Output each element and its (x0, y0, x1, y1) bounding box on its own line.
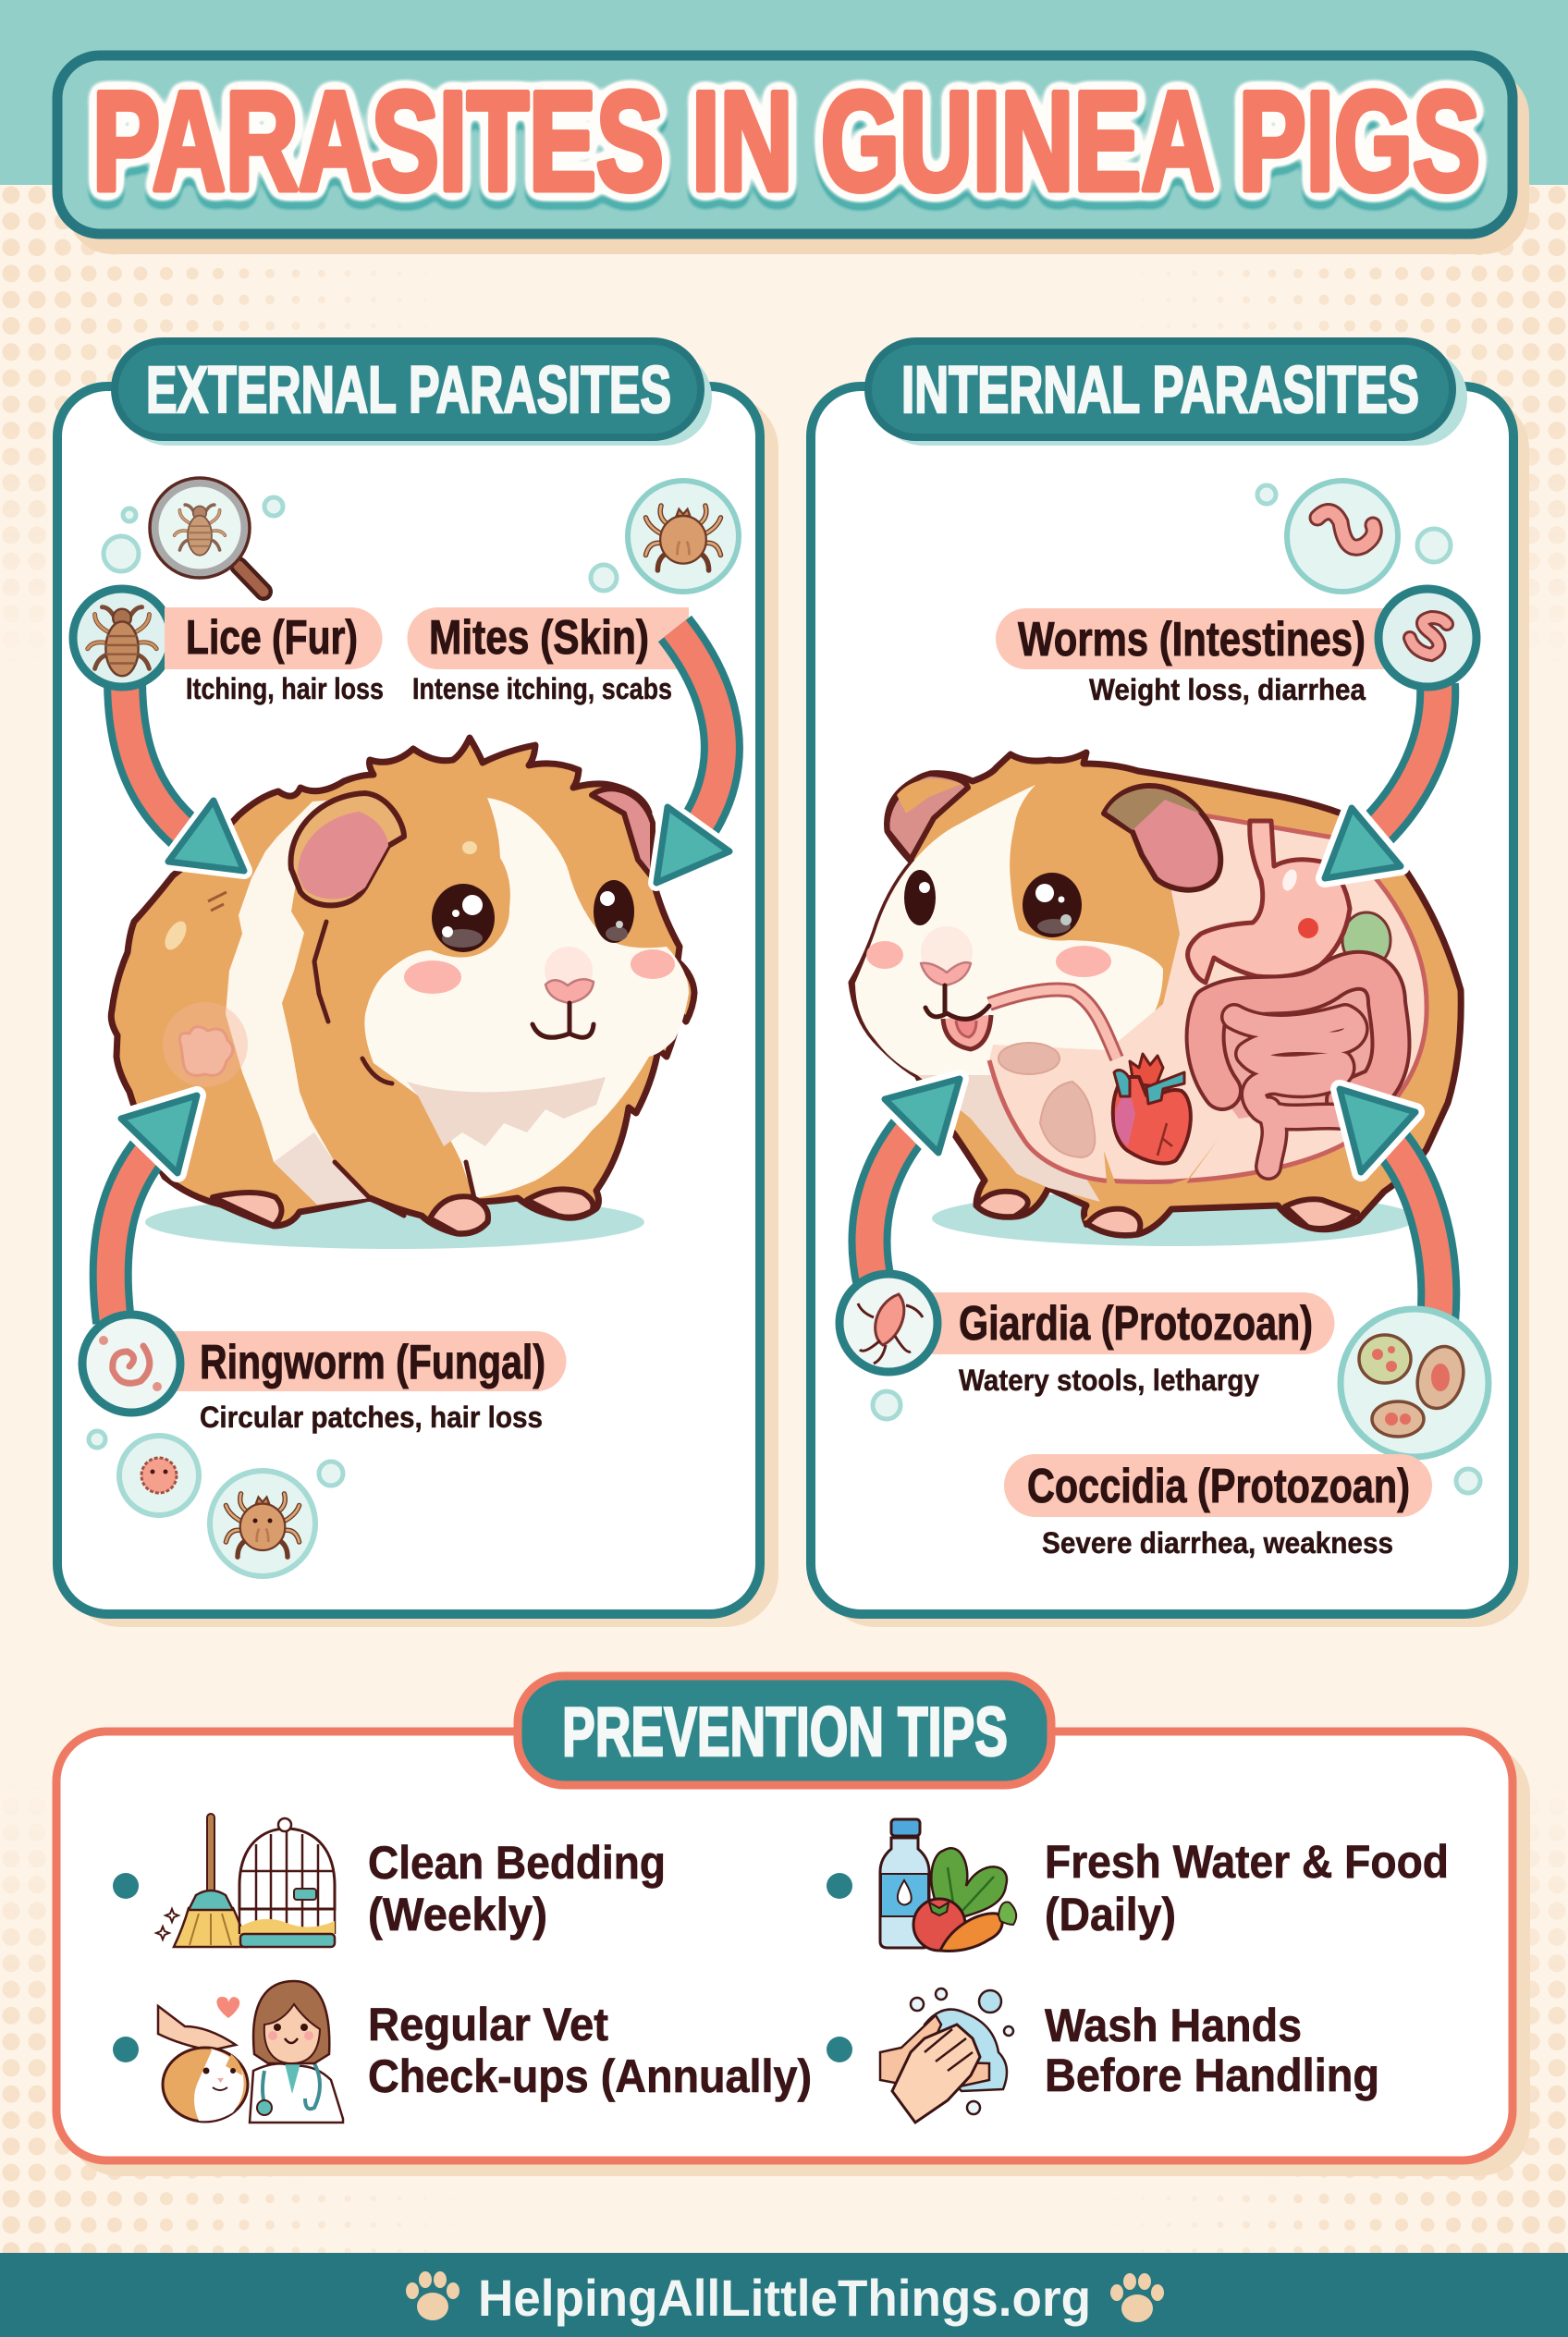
guinea pig: external view (111, 738, 694, 1249)
stomach (1188, 821, 1350, 983)
belly cutaway (989, 814, 1427, 1181)
icon: vet and guinea pig (158, 1981, 343, 2123)
lungs and liver (998, 1043, 1095, 1157)
heart (1113, 1054, 1191, 1163)
tip text: vet check-ups: Check-ups (Annually) (368, 2050, 812, 2102)
icon: ringworm circle (82, 1315, 180, 1413)
liver green (1342, 912, 1390, 968)
ears (887, 774, 1220, 890)
icon: mite bubble (628, 481, 739, 592)
tip text: fresh water: Fresh Water & Food (1045, 1836, 1449, 1888)
arrow: lice to fur (125, 679, 190, 837)
label: lice (165, 607, 384, 705)
arrow: worms to intestines (1370, 684, 1438, 837)
arrow: coccidia to large intestine (1340, 1089, 1439, 1322)
cheeks (404, 947, 675, 995)
label: coccidia: Coccidia (Protozoan) (1027, 1460, 1410, 1513)
heading pill: prevention: PREVENTION TIPS (562, 1693, 1008, 1770)
cheeks (866, 926, 1111, 978)
tip text: vet check-ups (368, 1999, 812, 2102)
dot pattern: top right (1117, 195, 1557, 703)
intestine backdrop (1202, 975, 1387, 1119)
dot pattern: top left (11, 195, 451, 703)
heading pill: internal (868, 341, 1467, 446)
tip text: wash hands: Before Handling (1045, 2049, 1379, 2101)
heading pill: external: EXTERNAL PARASITES (146, 354, 671, 427)
dot pattern: bottom left (11, 1744, 451, 2251)
eyes (432, 880, 634, 952)
small intestine (1234, 1017, 1355, 1167)
label: giardia: Giardia (Protozoan) (959, 1297, 1313, 1351)
tip text: clean bedding (368, 1837, 666, 1940)
icon: broom and cage (156, 1814, 335, 1947)
panel: external parasites (57, 341, 778, 1627)
footer text: HelpingAllLittleThings.org (478, 2269, 1091, 2327)
icon: washing hands (880, 1988, 1013, 2123)
floating bubbles (873, 485, 1480, 1493)
nose and mouth (533, 979, 594, 1037)
icon: lice circle (73, 589, 171, 687)
label: mites: Mites (Skin) (429, 611, 649, 665)
tip text: fresh water: (Daily) (1045, 1889, 1176, 1940)
front leg (1084, 1139, 1219, 1232)
icon: mite bubble small (210, 1471, 315, 1576)
skin patch (163, 1002, 248, 1087)
tip text: wash hands: Wash Hands (1045, 2000, 1302, 2051)
label: ringworm (164, 1331, 566, 1434)
nose and mouth (921, 962, 989, 1019)
label: lice: Lice (Fur) (186, 611, 358, 665)
label: mites (407, 607, 689, 705)
arrow: giardia to small intestine (870, 1079, 960, 1285)
arrowhead: lice (168, 801, 244, 871)
heading pill: external (115, 341, 712, 446)
icon: water bottle and vegetables (880, 1819, 1016, 1951)
eyes (904, 870, 1082, 937)
heading pill: prevention (518, 1676, 1051, 1785)
label: ringworm: Circular patches, hair loss (200, 1401, 543, 1434)
label: ringworm: Ringworm (Fungal) (200, 1336, 545, 1389)
feet (213, 1189, 594, 1233)
tip text: clean bedding: (Weekly) (368, 1889, 547, 1940)
label: mites: Intense itching, scabs (412, 672, 672, 705)
arrowhead: worms (1325, 808, 1401, 878)
footer (0, 2253, 1568, 2337)
label: coccidia (1004, 1454, 1432, 1560)
floating bubbles (89, 497, 617, 1486)
top header band (0, 0, 1568, 185)
title banner (57, 55, 1529, 254)
dot pattern: bottom right (1117, 1744, 1557, 2251)
large intestine (1206, 971, 1390, 1100)
icon: magnifying glass with louse (150, 478, 263, 592)
ear right (592, 789, 653, 878)
panel: prevention tips (56, 1676, 1530, 2176)
arrow: mites to skin (675, 629, 722, 837)
icon: paw right (1110, 2273, 1164, 2322)
ear left (291, 793, 404, 905)
icon: coccidia bubble (1341, 1309, 1488, 1457)
icon: paw left (406, 2271, 459, 2320)
label: worms: Weight loss, diarrhea (1089, 673, 1366, 706)
bullets (113, 1873, 852, 2062)
icon: giardia circle (839, 1274, 937, 1372)
feet (976, 1192, 1357, 1235)
tip text: wash hands (1045, 2000, 1379, 2101)
arrow: ringworm to patch (111, 1095, 197, 1322)
label: giardia (925, 1292, 1334, 1397)
tip text: clean bedding: Clean Bedding (368, 1837, 666, 1889)
esophagus and tongue (943, 990, 1117, 1058)
label: lice: Itching, hair loss (186, 672, 384, 705)
label: coccidia: Severe diarrhea, weakness (1042, 1526, 1393, 1560)
icon: worm circle (1378, 589, 1476, 687)
arrowhead: mites (656, 807, 729, 883)
guinea pig: internal view (851, 752, 1461, 1246)
panel: internal parasites (811, 341, 1529, 1627)
label: giardia: Watery stools, lethargy (959, 1364, 1259, 1397)
icon: worm bubble (1287, 481, 1398, 592)
label: worms: Worms (Intestines) (1018, 613, 1366, 667)
icon: spore bubble (119, 1436, 199, 1515)
tip text: fresh water (1045, 1836, 1449, 1940)
tip text: vet check-ups: Regular Vet (368, 1999, 608, 2050)
label: worms (996, 608, 1415, 706)
